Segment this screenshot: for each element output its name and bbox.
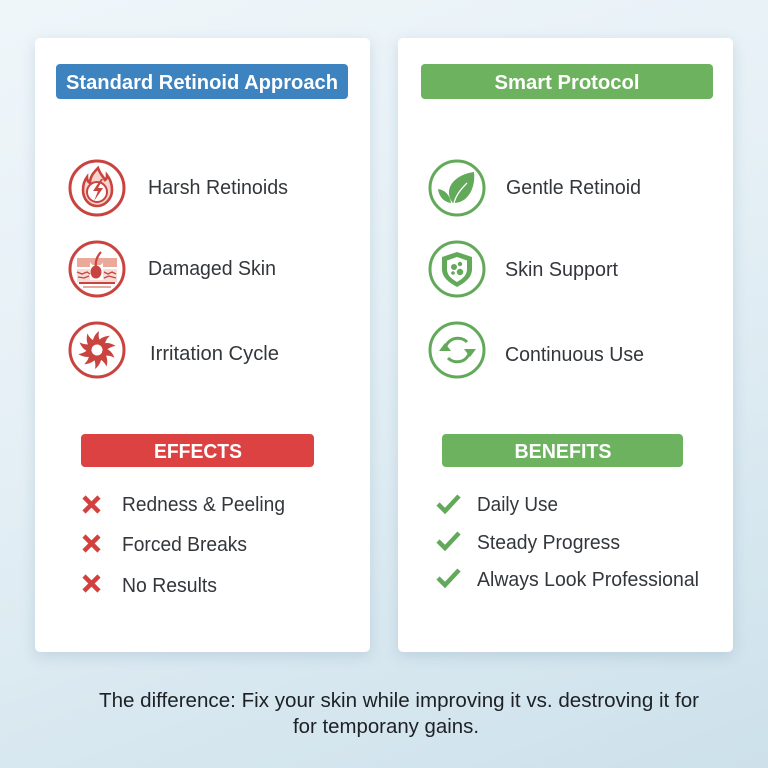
label: damaged skin: Damaged Skin xyxy=(148,258,276,280)
footer statement: The difference: Fix your skin while improving it vs. destroving it for xyxy=(99,690,699,712)
heading: benefits: BENEFITS xyxy=(514,441,612,463)
benefit: always look professional: Always Look Professional xyxy=(477,569,699,591)
icon: check xyxy=(438,533,459,548)
heading: smart protocol: Smart Protocol xyxy=(494,72,640,94)
label: harsh retinoids: Harsh Retinoids xyxy=(148,177,288,199)
benefit: daily use: Daily Use xyxy=(477,494,558,516)
label: skin support: Skin Support xyxy=(505,259,618,281)
icon: damaged skin xyxy=(70,242,124,296)
panel: standard retinoid approach background xyxy=(35,38,370,652)
label: gentle retinoid: Gentle Retinoid xyxy=(506,177,641,199)
effect: forced breaks: Forced Breaks xyxy=(122,534,247,556)
footer statement xyxy=(99,690,699,738)
footer statement: for temporany gains. xyxy=(293,716,479,738)
heading: smart protocol xyxy=(421,64,713,99)
heading: standard retinoid approach: Standard Retinoid Approach xyxy=(66,72,338,94)
icon: cross xyxy=(84,576,99,591)
panel: smart protocol background xyxy=(398,38,733,652)
icon: check xyxy=(438,496,459,511)
icon: flame xyxy=(70,161,124,215)
icon: shield xyxy=(430,242,484,296)
effect: no results: No Results xyxy=(122,575,217,597)
heading: effects xyxy=(81,434,314,467)
icon: irritation burst xyxy=(70,323,124,377)
icon: cross xyxy=(84,536,99,551)
effect: redness and peeling: Redness & Peeling xyxy=(122,494,285,516)
icon: cross xyxy=(84,497,99,512)
heading: benefits xyxy=(442,434,683,467)
icon: check xyxy=(438,570,459,585)
left panel content xyxy=(56,64,348,597)
benefit: steady progress: Steady Progress xyxy=(477,532,620,554)
heading: standard retinoid approach xyxy=(56,64,348,99)
icon: cycle arrows xyxy=(430,323,484,377)
heading: effects: EFFECTS xyxy=(154,441,242,463)
label: irritation cycle: Irritation Cycle xyxy=(150,343,279,365)
right panel content xyxy=(421,64,713,591)
label: continuous use: Continuous Use xyxy=(505,344,644,366)
icon: leaf xyxy=(430,161,484,215)
